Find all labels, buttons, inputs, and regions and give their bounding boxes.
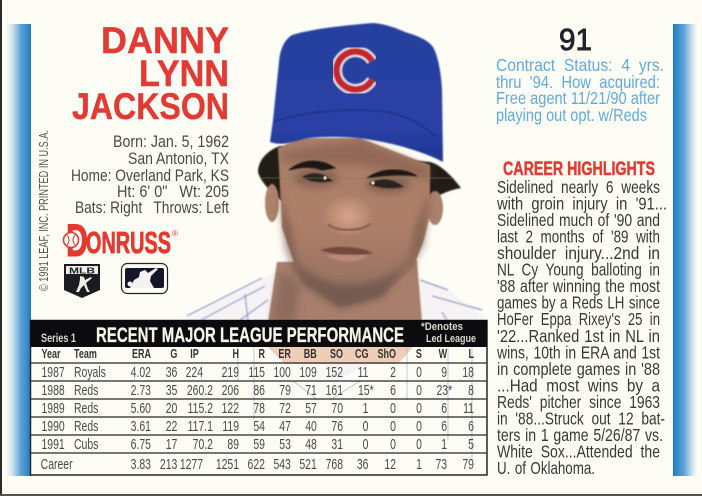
row 1988: 1988 — [41, 382, 65, 398]
row 1989: 70 — [331, 400, 343, 416]
row 1991: 59 — [253, 436, 265, 452]
contract status text: Contract Status: 4 yrs. — [496, 55, 664, 75]
row 1987: 0 — [416, 364, 422, 380]
player bio — [71, 132, 229, 217]
row 1989: Reds — [74, 400, 98, 416]
player name: LYNN — [139, 53, 229, 94]
contract status text: thru '94. How acquired: — [496, 72, 660, 92]
row 1990: 3.61 — [131, 418, 151, 434]
row 1988: 35 — [166, 382, 177, 398]
row career: 36 — [357, 456, 368, 472]
row 1989: 11 — [463, 400, 474, 416]
row 1988: 260.2 — [187, 382, 213, 398]
career highlights text: ...Had most wins by a — [497, 376, 660, 396]
career highlights text: U. of Oklahoma. — [497, 458, 595, 478]
row 1991: 0 — [416, 436, 422, 452]
career highlights text: ters in 1 game 5/26/87 vs. — [497, 425, 663, 445]
row 1987: 152 — [326, 364, 343, 380]
row 1988: 23* — [436, 382, 452, 398]
row 1989: 115.2 — [188, 400, 213, 416]
row 1990: 119 — [222, 418, 239, 434]
shirt — [187, 272, 487, 380]
row 1988: Reds — [74, 382, 98, 398]
player name: JACKSON — [72, 86, 229, 127]
row 1991: 6.75 — [131, 436, 151, 452]
row career: 3.83 — [131, 456, 151, 472]
row career: 768 — [326, 456, 343, 472]
donruss logo: ® — [172, 229, 178, 238]
copyright vertical text: © 1991 LEAF, INC. PRINTED IN U.S.A. — [37, 130, 51, 291]
row career: 213 — [160, 456, 177, 472]
row 1991: 89 — [227, 436, 239, 452]
career highlights text: shoulder injury...2nd in — [497, 243, 660, 263]
column headers: S — [416, 348, 422, 361]
contract status text — [496, 55, 664, 125]
row 1991 — [41, 436, 474, 452]
icon: MLB shield — [64, 264, 100, 298]
row 1988: 8 — [468, 382, 474, 398]
row 1987: Royals — [74, 364, 106, 380]
row 1988: 71 — [305, 382, 317, 398]
column headers: IP — [190, 348, 199, 361]
row 1989: 20 — [166, 400, 177, 416]
row 1989: 1 — [363, 400, 368, 416]
table frame and rules — [30, 320, 487, 475]
row 1989: 0 — [390, 400, 396, 416]
column headers: L — [468, 348, 474, 361]
row 1991: 1991 — [41, 436, 65, 452]
career highlights text: Sidelined much of '90 and — [497, 210, 660, 230]
icon: major league baseball logo — [122, 264, 168, 294]
table title bar: Series 1 — [41, 333, 76, 345]
eyebrows — [289, 161, 335, 170]
column headers: R — [258, 348, 265, 361]
row 1991: 31 — [331, 436, 343, 452]
column headers: ER — [278, 348, 291, 361]
cap — [270, 23, 443, 162]
row 1988: 15* — [358, 382, 374, 398]
career highlights text: with groin injury in '91... — [496, 194, 667, 214]
left blue bar — [6, 24, 31, 476]
career highlights text: White Sox...Attended the — [497, 442, 660, 462]
row 1987: 219 — [222, 364, 239, 380]
nose — [322, 194, 374, 238]
row career: 1 — [416, 456, 422, 472]
row career: 73 — [436, 456, 447, 472]
row 1990 — [41, 418, 474, 434]
column headers: W — [439, 348, 448, 361]
row 1989 — [41, 400, 474, 416]
eye sockets — [294, 169, 338, 187]
neck — [268, 260, 422, 322]
row 1991: 70.2 — [193, 436, 213, 452]
ears — [265, 184, 279, 222]
hair — [258, 146, 461, 204]
player name: DANNY — [101, 20, 229, 61]
right blue bar — [673, 24, 697, 476]
career highlights text: NL Cy Young balloting in — [497, 260, 660, 280]
column headers: G — [170, 348, 177, 361]
row 1991: Cubs — [74, 436, 98, 452]
table title bar: RECENT MAJOR LEAGUE PERFORMANCE — [96, 324, 404, 347]
icon: MLB shield: MLB — [69, 266, 95, 276]
table title bar: Led League — [426, 333, 476, 345]
row 1989: 0 — [416, 400, 422, 416]
scan line — [260, 177, 452, 179]
row 1990: 76 — [331, 418, 343, 434]
row 1990: 6 — [468, 418, 474, 434]
player bio: Ht: 6ʹ 0ʺ Wt: 205 — [117, 182, 229, 201]
row 1991: 53 — [279, 436, 291, 452]
row 1987: 18 — [462, 364, 474, 380]
row 1988: 0 — [416, 382, 422, 398]
row 1987: 2 — [390, 364, 396, 380]
row 1989: 122 — [222, 400, 239, 416]
career highlights text: wins, 10th in ERA and 1st — [496, 342, 660, 362]
row 1991: 0 — [363, 436, 368, 452]
row 1990: 0 — [416, 418, 422, 434]
neck shadow — [272, 270, 300, 322]
row 1990: Reds — [74, 418, 98, 434]
row backdrop with neck showing through — [268, 347, 413, 364]
column headers: Year — [41, 348, 61, 361]
row 1991: 1 — [441, 436, 447, 452]
mouth — [320, 247, 373, 255]
brow shadow — [280, 140, 430, 180]
row 1990: 1990 — [41, 418, 65, 434]
row 1988: 79 — [279, 382, 291, 398]
row 1990: 117.1 — [188, 418, 213, 434]
player bio: Home: Overland Park, KS — [71, 166, 229, 185]
career highlights text: Reds' pitcher since 1963 — [497, 392, 660, 412]
eyes — [302, 173, 333, 182]
row 1989: 5.60 — [131, 400, 151, 416]
player name — [72, 20, 229, 127]
row 1987: 100 — [273, 364, 291, 380]
career highlights text: Sidelined nearly 6 weeks — [497, 177, 660, 197]
row career: 1277 — [180, 456, 203, 472]
row career: 521 — [299, 456, 317, 472]
row career: 79 — [462, 456, 474, 472]
column headers: BB — [304, 348, 317, 361]
career highlights text: '88 after winning the most — [497, 276, 660, 296]
row 1987: 224 — [186, 364, 203, 380]
row 1987: 1987 — [41, 364, 65, 380]
row 1991: 0 — [390, 436, 396, 452]
row 1990: 22 — [166, 418, 177, 434]
donruss logo: ONRUSS — [86, 225, 171, 260]
donruss logo: D — [66, 215, 88, 266]
stats table — [30, 320, 487, 475]
row 1989: 72 — [279, 400, 291, 416]
row career: 543 — [273, 456, 291, 472]
row 1987 — [41, 364, 474, 380]
career highlights text: in complete games in '88 — [497, 359, 660, 379]
row 1990: 6 — [441, 418, 447, 434]
column headers: CG — [355, 348, 368, 361]
row 1987: 36 — [166, 364, 177, 380]
column headers: Team — [74, 348, 97, 361]
row 1988: 161 — [326, 382, 343, 398]
column headers — [41, 348, 474, 361]
row career: 622 — [248, 456, 265, 472]
row 1991: 48 — [305, 436, 317, 452]
stubble — [290, 256, 414, 309]
row 1987: 9 — [441, 364, 447, 380]
row 1989: 57 — [305, 400, 317, 416]
table title bar — [30, 320, 487, 347]
row 1987: 115 — [248, 364, 265, 380]
row 1989: 1989 — [41, 400, 65, 416]
row 1988: 86 — [253, 382, 265, 398]
row 1989: 78 — [253, 400, 265, 416]
player bio: Born: Jan. 5, 1962 — [113, 132, 229, 151]
row career: 1251 — [216, 456, 239, 472]
player bio: San Antonio, TX — [128, 149, 229, 168]
career highlights text — [496, 177, 667, 478]
row 1988: 206 — [222, 382, 239, 398]
row 1991: 17 — [166, 436, 177, 452]
player photo — [187, 23, 487, 380]
card number: 91 — [559, 22, 592, 57]
row 1990: 0 — [363, 418, 368, 434]
table title bar: *Denotes — [421, 321, 463, 333]
row 1991: 5 — [468, 436, 474, 452]
donruss logo — [64, 215, 178, 266]
row 1987: 11 — [358, 364, 368, 380]
contract status text: Free agent 11/21/90 after — [496, 88, 660, 108]
cheek shadow — [278, 190, 300, 282]
row career: Career — [41, 456, 73, 472]
row 1987: 109 — [299, 364, 317, 380]
row 1988 — [41, 382, 474, 398]
row career — [41, 456, 474, 472]
row 1987: 4.02 — [131, 364, 151, 380]
player bio: Bats: Right Throws: Left — [75, 198, 229, 217]
row 1989: 6 — [441, 400, 447, 416]
row 1990: 40 — [305, 418, 317, 434]
row career: 12 — [384, 456, 396, 472]
row 1990: 0 — [390, 418, 396, 434]
column headers: ERA — [132, 348, 151, 361]
column headers: ShO — [378, 348, 396, 361]
face — [278, 138, 430, 307]
career highlights text: '22...Ranked 1st in NL in — [497, 326, 660, 346]
row 1990: 54 — [253, 418, 265, 434]
cap C logo — [337, 52, 372, 90]
row 1988: 6 — [390, 382, 396, 398]
column headers: H — [233, 348, 239, 361]
row 1988: 2.73 — [131, 382, 151, 398]
contract status text: playing out opt. w/Reds — [496, 105, 647, 125]
column headers: SO — [330, 348, 343, 361]
row 1990: 47 — [279, 418, 291, 434]
